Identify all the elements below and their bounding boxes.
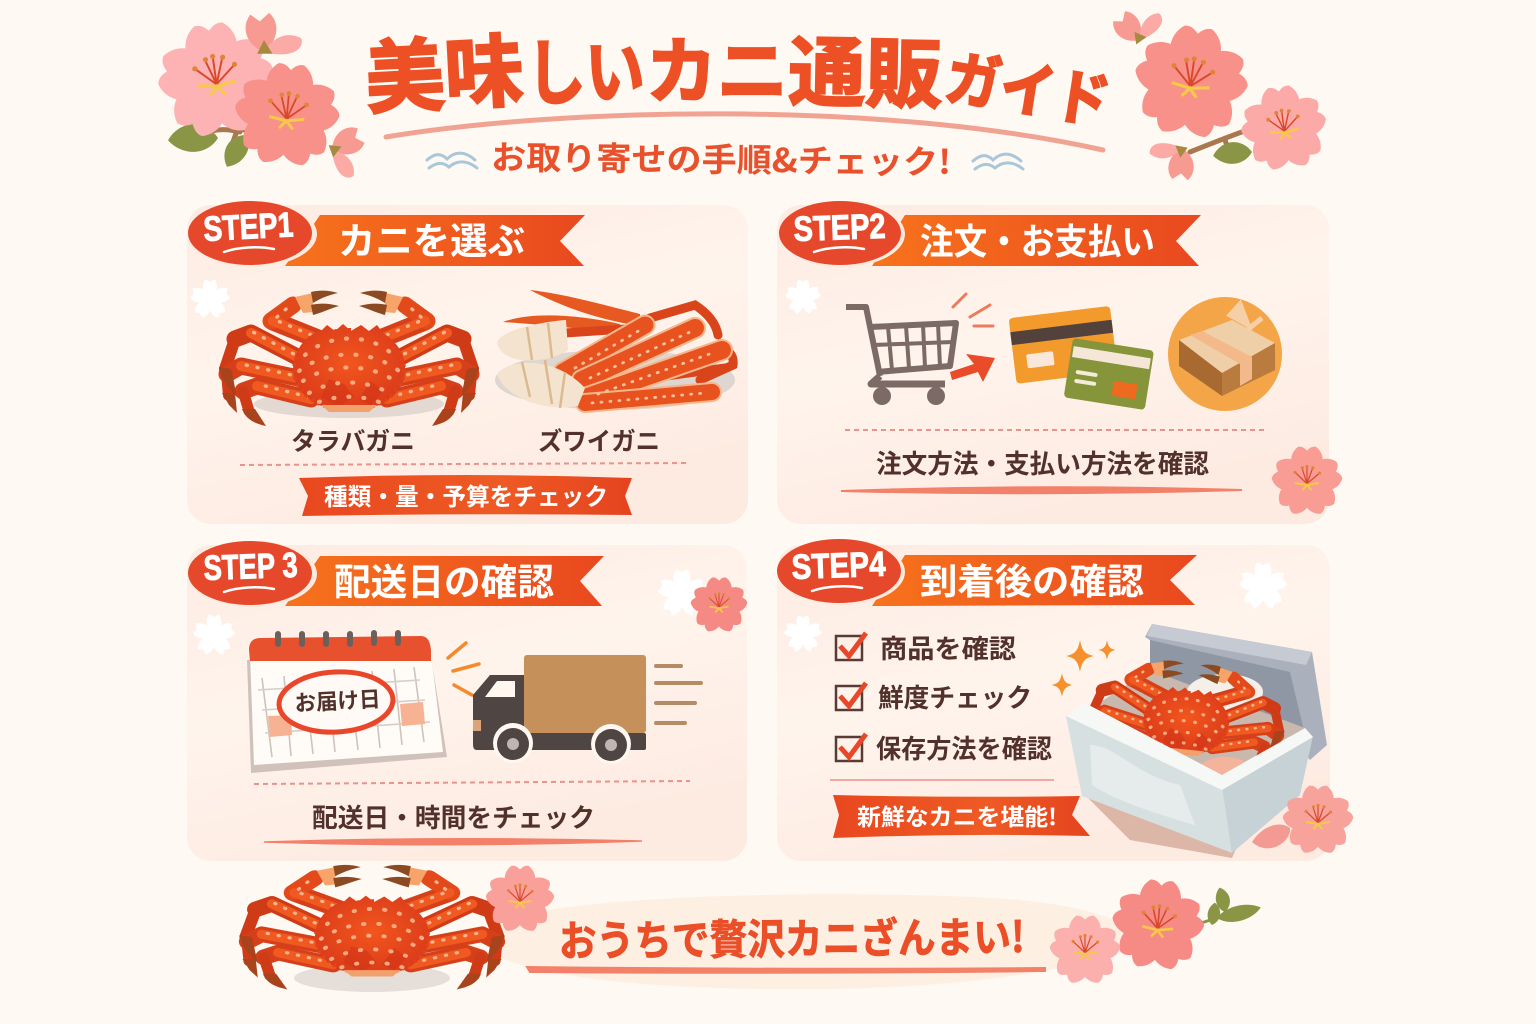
badge: STEP 2: STEP2 [793, 207, 886, 249]
text: check date and time: 配送日・時間をチェック [312, 798, 595, 835]
ribbon heading: step 1: カニを選ぶ [338, 211, 525, 265]
banner: closing message [239, 865, 1263, 992]
badge: STEP 3 [187, 541, 317, 607]
icon: speed lines [656, 666, 701, 723]
icon: calendar [247, 633, 447, 773]
label: king crab: タラバガニ [291, 422, 415, 458]
panel: step 1 choose crab [187, 201, 748, 524]
icon: blossom [1269, 447, 1345, 518]
icon: delivery truck [473, 655, 646, 764]
banner background [490, 894, 1135, 989]
icon: orange card [1009, 306, 1118, 384]
icon: right wave [973, 154, 1023, 169]
title underline [386, 114, 1103, 150]
icon: white blossoms [783, 562, 1288, 653]
illustration: king crab [219, 291, 479, 426]
underline [527, 967, 1045, 973]
icon: accent lines [953, 294, 993, 326]
icon: left wave [427, 153, 477, 168]
illustration: snow crab legs [495, 290, 735, 410]
ribbon: check type, amount and budget: 種類・量・予算をチェック [324, 477, 608, 512]
checklist [836, 629, 1052, 766]
cherry blossoms: top left [147, 13, 374, 181]
ribbon heading: step 4 [872, 553, 1197, 606]
item: check product: 商品を確認 [880, 629, 1016, 666]
subtitle [427, 131, 1023, 184]
icon: motion lines [448, 643, 479, 695]
badge: STEP 1: STEP1 [202, 205, 294, 249]
closing text: おうちで贅沢カニざんまい! [559, 904, 1025, 969]
dashed divider [845, 429, 1267, 431]
panel: step 3 delivery date [187, 541, 749, 861]
item: check freshness: 鮮度チェック [878, 678, 1032, 715]
icon: arrow [950, 354, 995, 382]
badge: STEP 4: STEP4 [791, 545, 887, 587]
item: check storage method: 保存方法を確認 [876, 729, 1052, 766]
badge: STEP 3: STEP 3 [203, 546, 298, 588]
dashed divider [240, 463, 687, 465]
icon: green card [1064, 338, 1154, 410]
ribbon heading: step 1 [285, 211, 585, 266]
title: ガイド [941, 45, 1114, 137]
cherry blossoms: top right [1109, 0, 1335, 182]
underline [264, 839, 642, 845]
badge: STEP 1 [187, 201, 317, 267]
icon: blossoms top right [657, 569, 749, 635]
badge: STEP 2 [779, 201, 905, 267]
badge: STEP 4 [777, 539, 905, 605]
ribbon: enjoy fresh crab [833, 795, 1090, 838]
text: confirm order and payment: 注文方法・支払い方法を確認 [876, 444, 1209, 481]
panel: step 4 after arrival [777, 539, 1356, 861]
underline [841, 487, 1242, 493]
ribbon heading: step 3: 配送日の確認 [334, 552, 554, 606]
dashed divider [254, 781, 690, 784]
title: 通販 [788, 31, 943, 119]
label: snow crab: ズワイガニ [538, 422, 660, 458]
icon: parcel in orange circle [1168, 297, 1282, 411]
ribbon heading: step 3 [285, 552, 604, 606]
oval: delivery date [278, 669, 394, 735]
sparkles [1052, 640, 1116, 697]
icon: blossom left [484, 866, 556, 935]
title: カニ [646, 33, 788, 113]
icon: white blossom [192, 614, 236, 656]
icon: blossoms and leaves right [1047, 876, 1263, 987]
title: 美味 [363, 27, 526, 124]
subtitle text: お取り寄せの手順&チェック! [491, 131, 951, 184]
icon: white blossom [784, 279, 822, 315]
text: delivery date: お届け日 [294, 682, 381, 718]
title [363, 27, 1114, 137]
ribbon heading: step 2: 注文・お支払い [920, 213, 1155, 265]
illustration: foam box with crab [1066, 624, 1327, 858]
illustration: crab on plate [239, 865, 505, 992]
icon: white blossom [189, 279, 231, 319]
title: しい [526, 33, 645, 115]
icon: blossom [1252, 786, 1356, 857]
divider [830, 779, 1054, 781]
panel: step 2 order and payment [777, 201, 1345, 524]
ribbon: enjoy fresh crab: 新鮮なカニを堪能! [857, 798, 1057, 832]
ribbon heading: step 4: 到着後の確認 [920, 553, 1144, 605]
icon: shopping cart [846, 307, 956, 405]
